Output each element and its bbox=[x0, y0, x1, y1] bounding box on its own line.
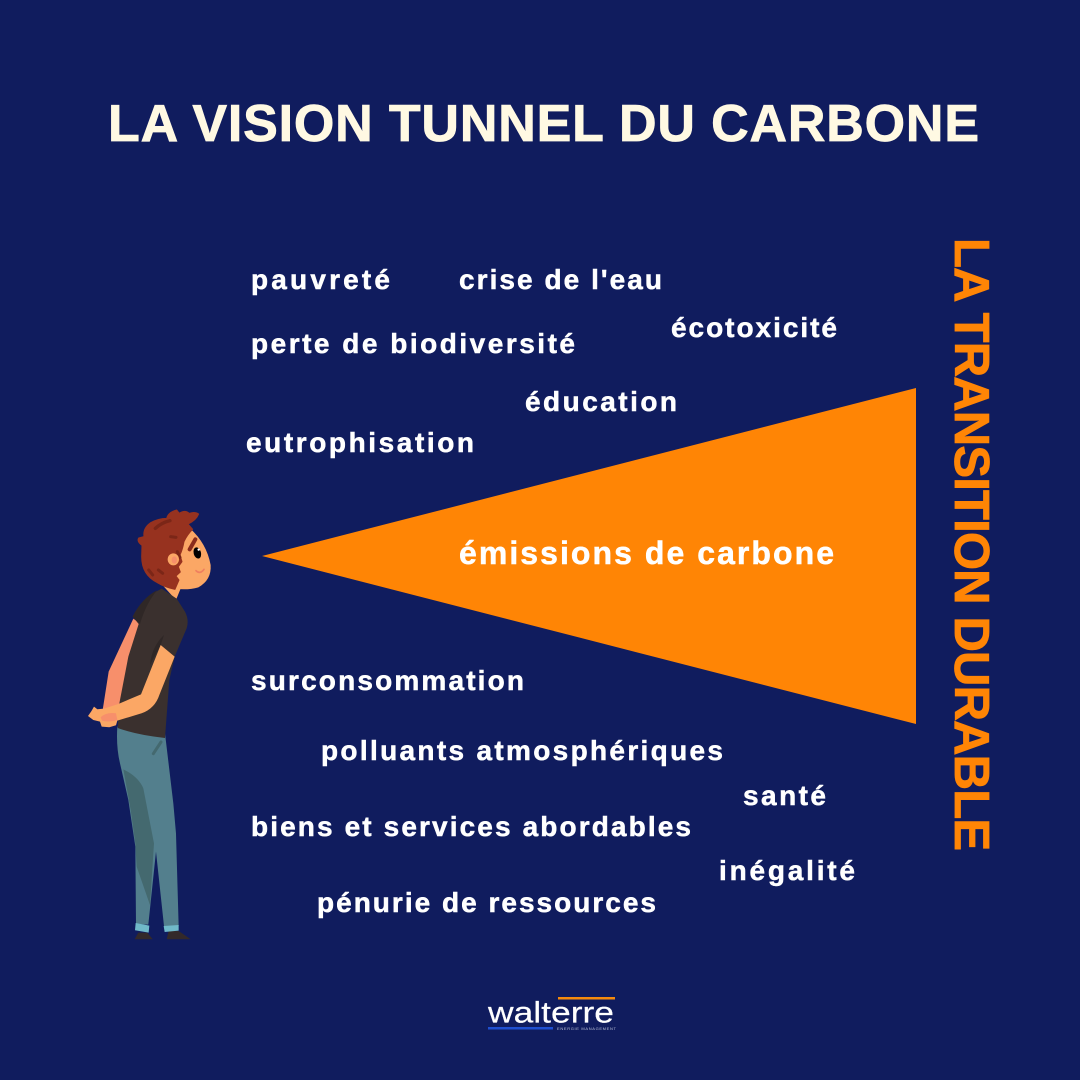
logo blue bar bbox=[488, 1027, 553, 1030]
far arm bbox=[103, 619, 141, 710]
issue: santé: santé bbox=[743, 780, 826, 811]
mouth bbox=[196, 569, 204, 572]
issue: surconsommation: surconsommation bbox=[251, 665, 524, 696]
hair bbox=[138, 510, 199, 589]
tunnel triangle bbox=[262, 388, 916, 724]
issue: polluants atmosphériques: polluants atmosphériques bbox=[321, 735, 723, 766]
issue: pénurie de ressources: pénurie de ressources bbox=[317, 887, 656, 918]
issue: pauvreté: pauvreté bbox=[251, 264, 390, 295]
t-shirt bbox=[118, 589, 188, 738]
neck bbox=[163, 586, 182, 600]
eye bbox=[192, 547, 202, 559]
title: LA VISION TUNNEL DU CARBONE bbox=[108, 95, 979, 153]
issue: eutrophisation: eutrophisation bbox=[246, 427, 474, 458]
legs bbox=[117, 727, 191, 939]
label: carbon emissions: émissions de carbone bbox=[459, 535, 834, 571]
eyebrow bbox=[190, 539, 195, 549]
face bbox=[163, 528, 211, 589]
near arm and hands bbox=[88, 645, 175, 727]
issues below the tunnel bbox=[251, 665, 855, 918]
issue: crise de l'eau: crise de l'eau bbox=[459, 264, 662, 295]
issues above the tunnel bbox=[246, 264, 837, 458]
ear bbox=[168, 553, 179, 565]
issue: biens et services abordables: biens et services abordables bbox=[251, 811, 691, 842]
issue: écotoxicité: écotoxicité bbox=[671, 312, 837, 343]
logo orange bar bbox=[558, 997, 615, 1000]
logo: walterre bbox=[487, 996, 617, 1031]
logo tagline: ENERGIE MANAGEMENT bbox=[557, 1026, 617, 1031]
issue: éducation: éducation bbox=[525, 386, 677, 417]
logo wordmark: walterre bbox=[487, 996, 614, 1030]
issue: perte de biodiversité: perte de biodiversité bbox=[251, 328, 575, 359]
side heading: la transition durable: LA TRANSITION DURABLE bbox=[944, 238, 998, 851]
issue: inégalité: inégalité bbox=[719, 855, 855, 886]
person looking into the tunnel bbox=[88, 510, 211, 939]
